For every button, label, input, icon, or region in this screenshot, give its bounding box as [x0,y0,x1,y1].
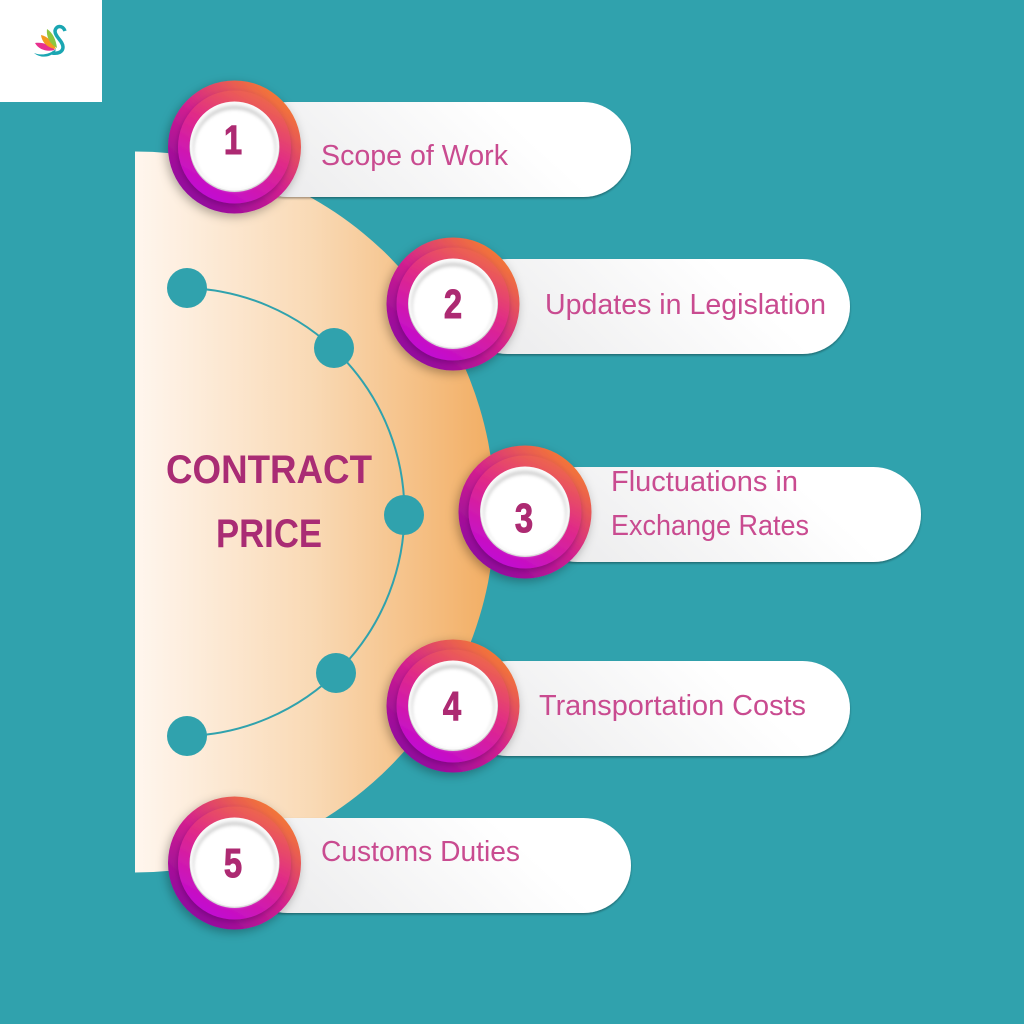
item 5: customs duties: Customs Duties [321,836,520,868]
title [166,448,372,556]
item 1: scope of work [168,80,631,214]
item 5: customs duties [168,796,631,930]
title: PRICE [216,512,322,556]
item 4: transportation costs [386,640,850,772]
title: CONTRACT [166,448,372,492]
item 3: fluctuations in exchange rates [458,446,921,578]
item 4: transportation costs: Transportation Costs [539,690,806,722]
item 2: updates in legislation: 2 [444,280,462,327]
item 4: transportation costs: 4 [443,682,461,729]
item 3: fluctuations in exchange rates: Exchange Rates [611,510,809,542]
item 5: customs duties: 5 [224,839,242,886]
arc with nodes [167,268,424,756]
item 1: scope of work: Scope of Work [321,140,508,172]
icon: swan logo [34,26,65,57]
logo panel [0,0,102,102]
item 2: updates in legislation: Updates in Legislation [545,289,826,321]
item 2: updates in legislation [386,238,850,370]
panel: contract price half circle [135,152,495,872]
item 3: fluctuations in exchange rates: 3 [515,494,533,541]
item 3: fluctuations in exchange rates: Fluctuations in [611,466,798,498]
item 1: scope of work: 1 [224,116,242,163]
